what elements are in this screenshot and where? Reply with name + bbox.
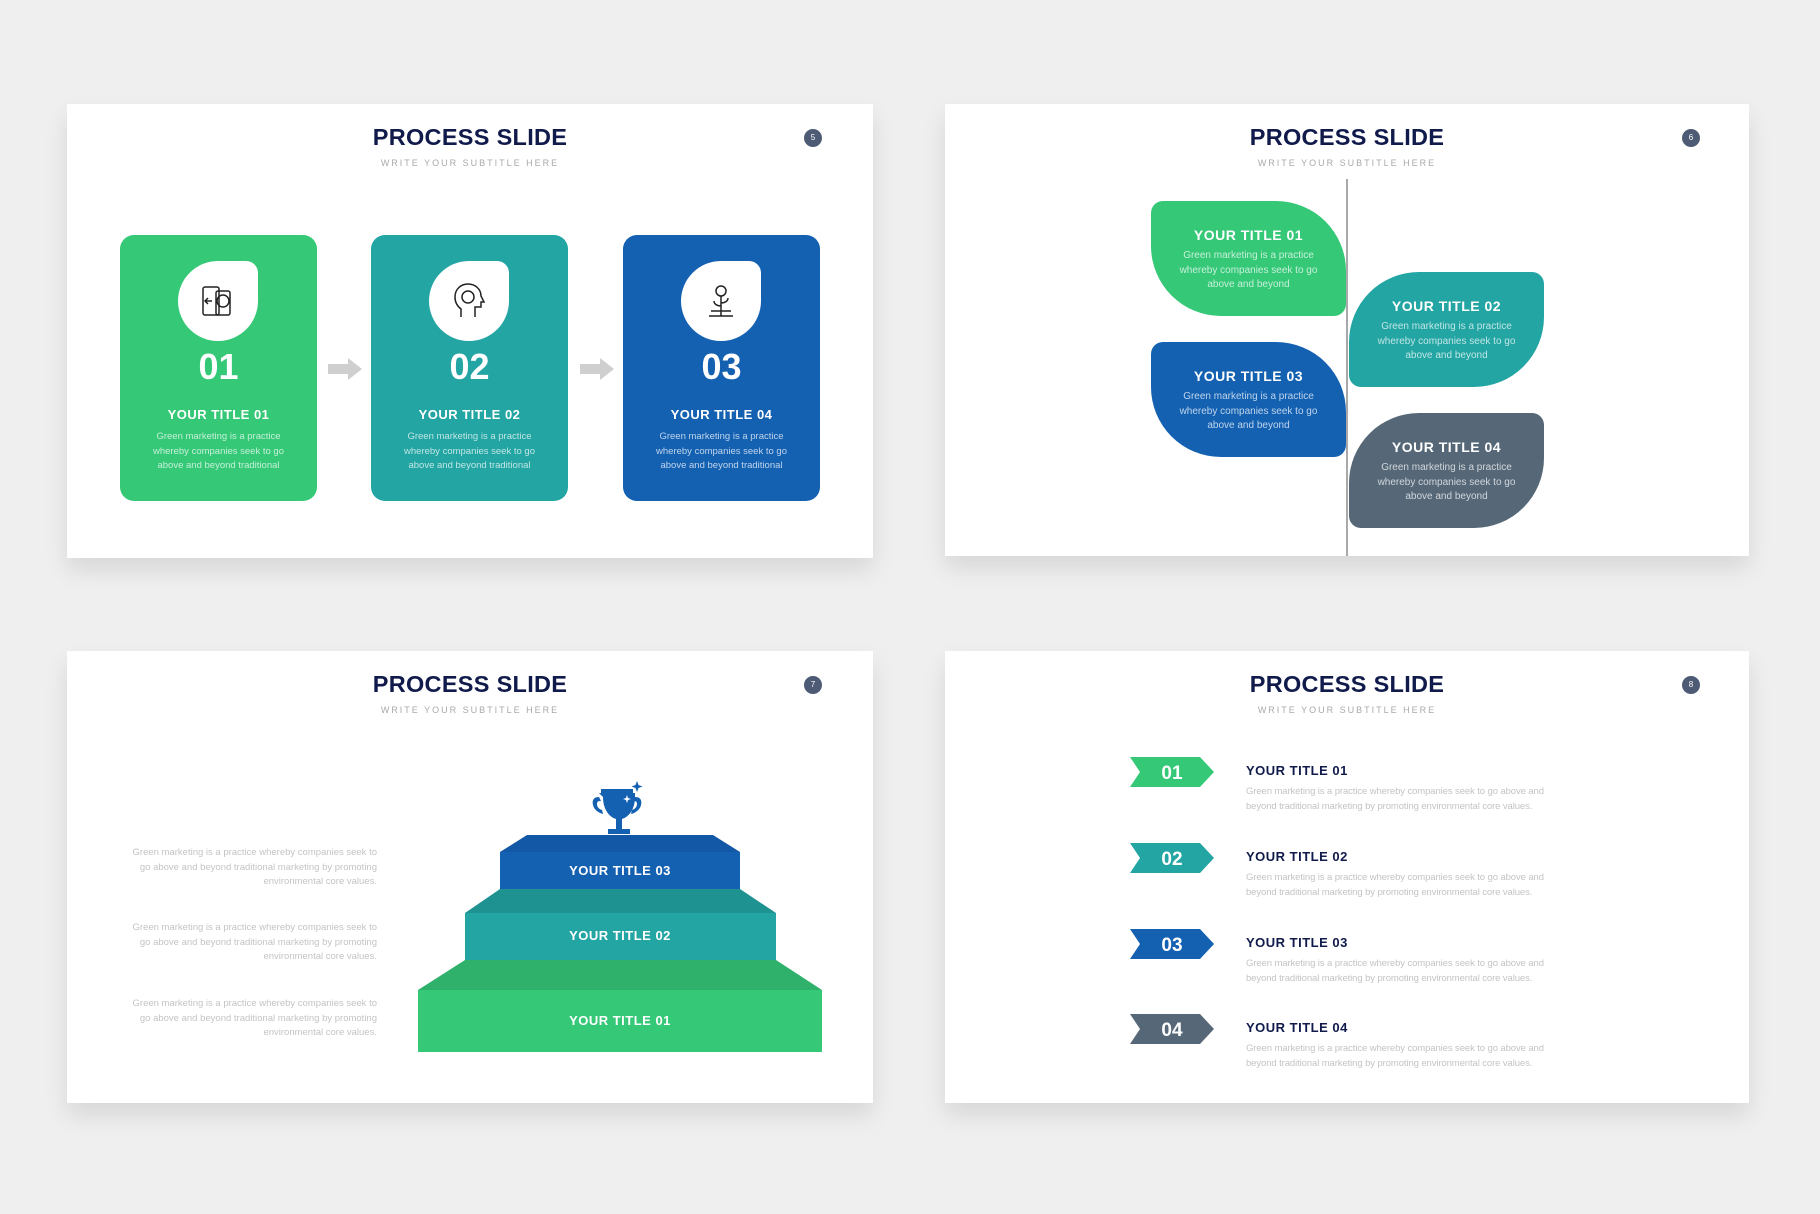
item 01: YOUR TITLE 01 bbox=[1246, 763, 1348, 778]
item 02: beyond traditional marketing by promoting environmental core values. bbox=[1246, 887, 1532, 898]
podium chart: YOUR TITLE 02 bbox=[569, 928, 671, 943]
page number bbox=[804, 129, 822, 147]
text block 2: Green marketing is a practice whereby companies seek to bbox=[133, 922, 377, 933]
item 01: Green marketing is a practice whereby companies seek to go above and bbox=[1246, 786, 1544, 797]
page number bbox=[1682, 129, 1700, 147]
item 03: beyond traditional marketing by promoting environmental core values. bbox=[1246, 973, 1532, 984]
item 04: Green marketing is a practice whereby companies seek to go above and bbox=[1246, 1043, 1544, 1054]
text block 2: go above and beyond traditional marketing by promoting bbox=[140, 936, 377, 948]
leaf 03: YOUR TITLE 03 bbox=[1194, 368, 1303, 384]
podium chart: YOUR TITLE 01 bbox=[569, 1013, 671, 1028]
icon: trophy bbox=[592, 781, 642, 834]
heading: PROCESS SLIDE bbox=[373, 671, 567, 697]
card 02: YOUR TITLE 02 bbox=[419, 407, 520, 422]
text block 3: go above and beyond traditional marketing by promoting bbox=[140, 1012, 377, 1024]
icon: money plant bbox=[681, 261, 761, 341]
item 04: beyond traditional marketing by promoting environmental core values. bbox=[1246, 1058, 1532, 1069]
item 02: YOUR TITLE 02 bbox=[1246, 849, 1348, 864]
text block 1: environmental core values. bbox=[263, 876, 377, 887]
card 03: YOUR TITLE 04 bbox=[671, 407, 772, 422]
heading: PROCESS SLIDE bbox=[373, 124, 567, 150]
item 03: 03 bbox=[1161, 935, 1183, 956]
item 02 bbox=[1130, 843, 1544, 898]
card 03: above and beyond traditional bbox=[660, 460, 782, 471]
item 03 bbox=[1130, 929, 1544, 984]
card 02: 02 bbox=[449, 346, 490, 387]
panel: leaf process bbox=[945, 104, 1749, 556]
leaf 03: above and beyond bbox=[1207, 420, 1290, 431]
icon: phone money bbox=[178, 261, 258, 341]
card 02: Green marketing is a practice bbox=[407, 431, 532, 442]
card 01: above and beyond traditional bbox=[157, 460, 280, 471]
arrow 1 bbox=[328, 358, 362, 380]
page number bbox=[1682, 676, 1700, 694]
item 02: Green marketing is a practice whereby companies seek to go above and bbox=[1246, 872, 1544, 883]
card 01: whereby companies seek to go bbox=[153, 446, 284, 456]
page number: 7 bbox=[811, 680, 815, 689]
leaf 03: whereby companies seek to go bbox=[1180, 406, 1317, 416]
card 03: 03 bbox=[701, 346, 742, 387]
card 03 bbox=[623, 235, 820, 501]
subtitle: WRITE YOUR SUBTITLE HERE bbox=[381, 158, 559, 168]
heading: PROCESS SLIDE bbox=[1250, 124, 1444, 150]
leaf 04: Green marketing is a practice bbox=[1381, 462, 1512, 473]
text block 2: environmental core values. bbox=[263, 951, 377, 962]
item 03: Green marketing is a practice whereby companies seek to go above and bbox=[1246, 958, 1544, 969]
item 02: 02 bbox=[1161, 849, 1183, 870]
item 01: beyond traditional marketing by promoting environmental core values. bbox=[1246, 801, 1532, 812]
page number: 5 bbox=[811, 133, 815, 142]
card 01: Green marketing is a practice bbox=[156, 431, 281, 442]
item 03: YOUR TITLE 03 bbox=[1246, 935, 1348, 950]
leaf 02: YOUR TITLE 02 bbox=[1392, 298, 1501, 314]
leaf 02: above and beyond bbox=[1405, 350, 1488, 361]
leaf 01: Green marketing is a practice bbox=[1183, 250, 1314, 261]
item 04 bbox=[1130, 1014, 1544, 1069]
card 03: whereby companies seek to go bbox=[656, 446, 787, 456]
subtitle: WRITE YOUR SUBTITLE HERE bbox=[1258, 705, 1436, 715]
text block 1 bbox=[133, 847, 377, 887]
leaf 01: YOUR TITLE 01 bbox=[1194, 227, 1303, 243]
leaf 03: Green marketing is a practice bbox=[1183, 391, 1314, 402]
leaf 02 bbox=[1349, 272, 1544, 387]
item 01: 01 bbox=[1161, 763, 1183, 784]
card 01: 01 bbox=[198, 346, 239, 387]
subtitle: WRITE YOUR SUBTITLE HERE bbox=[381, 705, 559, 715]
panel: numbered list bbox=[945, 651, 1749, 1103]
leaf 04: above and beyond bbox=[1405, 491, 1488, 502]
card 03: Green marketing is a practice bbox=[659, 431, 784, 442]
leaf 02: whereby companies seek to go bbox=[1378, 336, 1515, 346]
panel: process cards bbox=[67, 104, 873, 558]
leaf 03 bbox=[1151, 342, 1346, 457]
page number: 6 bbox=[1689, 133, 1693, 142]
item 01 bbox=[1130, 757, 1544, 812]
leaf 04: YOUR TITLE 04 bbox=[1392, 439, 1501, 455]
card 02 bbox=[371, 235, 568, 501]
subtitle: WRITE YOUR SUBTITLE HERE bbox=[1258, 158, 1436, 168]
item 04: YOUR TITLE 04 bbox=[1246, 1020, 1348, 1035]
podium chart bbox=[418, 835, 822, 1052]
leaf 01: above and beyond bbox=[1207, 279, 1290, 290]
card 01 bbox=[120, 235, 317, 501]
text block 3: Green marketing is a practice whereby companies seek to bbox=[133, 998, 377, 1009]
card 01: YOUR TITLE 01 bbox=[168, 407, 269, 422]
text block 3: environmental core values. bbox=[263, 1027, 377, 1038]
leaf 01 bbox=[1151, 201, 1346, 316]
card 02: whereby companies seek to go bbox=[404, 446, 535, 456]
icon: head money bbox=[429, 261, 509, 341]
leaf 02: Green marketing is a practice bbox=[1381, 321, 1512, 332]
heading: PROCESS SLIDE bbox=[1250, 671, 1444, 697]
leaf 01: whereby companies seek to go bbox=[1180, 264, 1317, 276]
item 04: 04 bbox=[1161, 1020, 1183, 1041]
podium chart: YOUR TITLE 03 bbox=[569, 863, 671, 878]
page number: 8 bbox=[1689, 680, 1693, 689]
panel: podium bbox=[67, 651, 873, 1103]
text block 2 bbox=[133, 922, 377, 962]
leaf 04: whereby companies seek to go bbox=[1378, 476, 1515, 488]
text block 1: go above and beyond traditional marketing by promoting bbox=[140, 862, 377, 872]
text block 1: Green marketing is a practice whereby companies seek to bbox=[133, 847, 377, 858]
card 02: above and beyond traditional bbox=[408, 460, 530, 471]
text block 3 bbox=[133, 998, 377, 1038]
leaf 04 bbox=[1349, 413, 1544, 528]
page number bbox=[804, 676, 822, 694]
arrow 2 bbox=[580, 358, 614, 380]
